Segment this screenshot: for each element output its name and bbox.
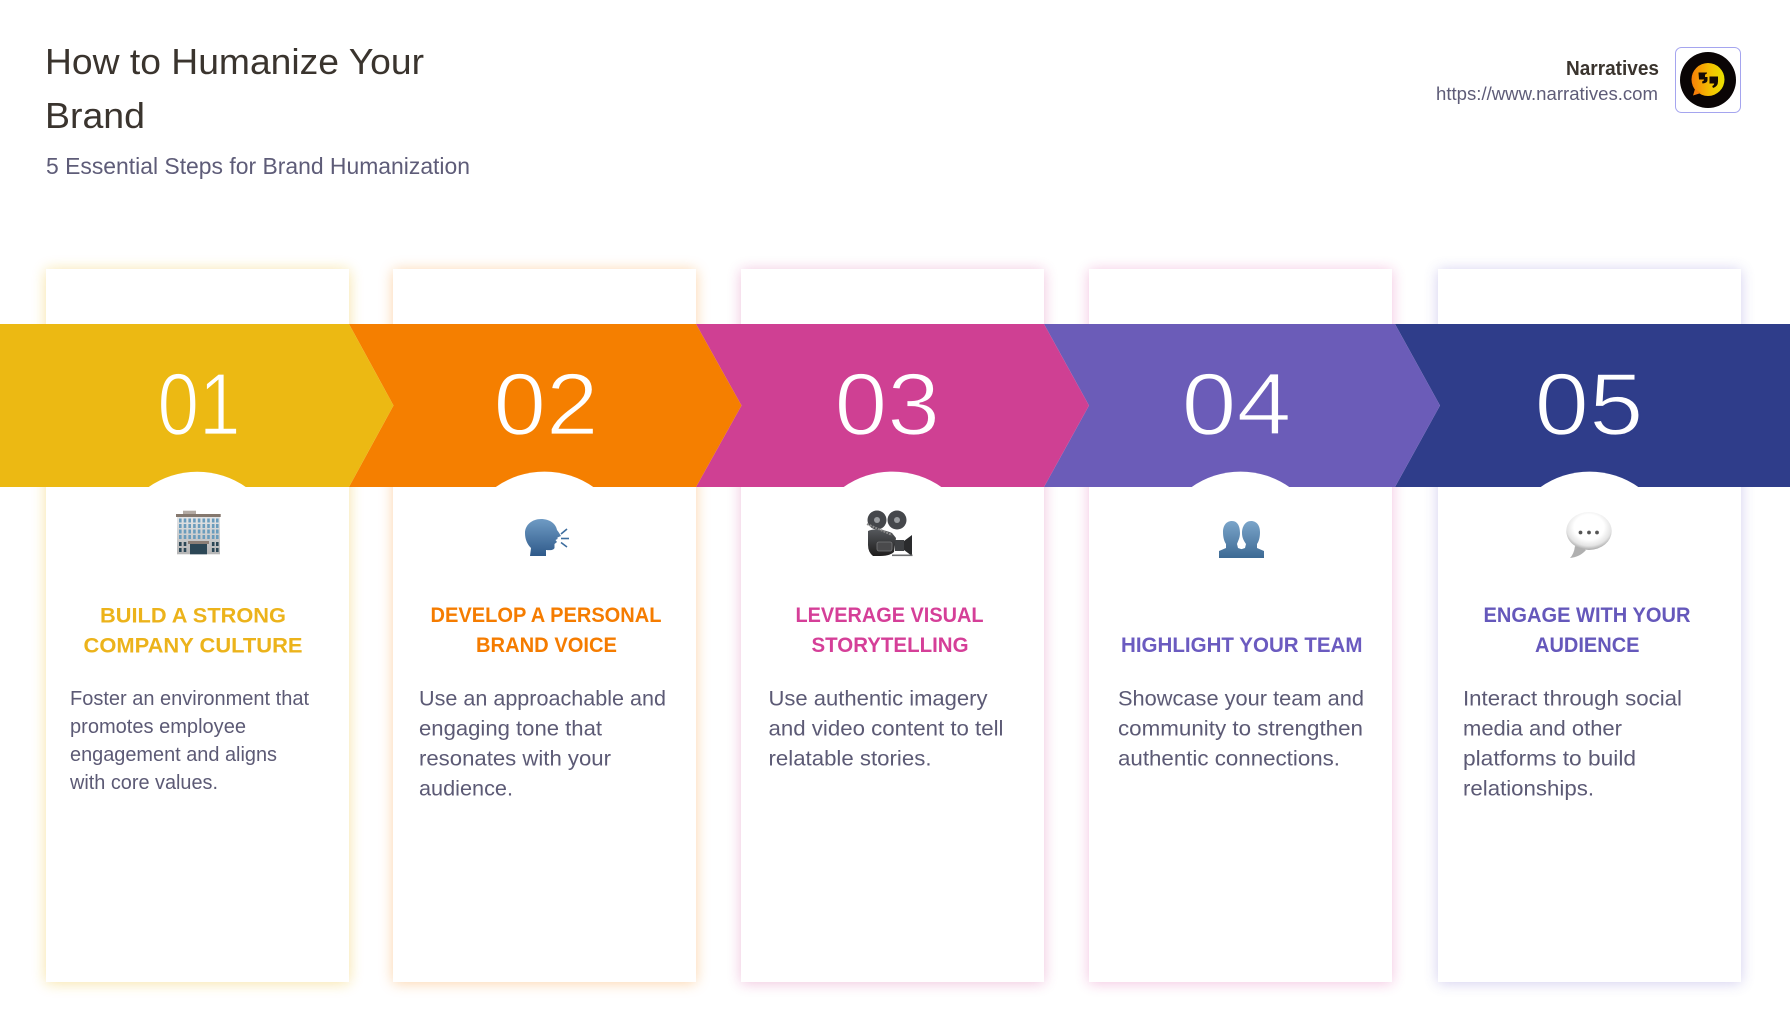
body text: step 2 (419, 687, 666, 801)
heading: step 5 (1484, 603, 1691, 657)
heading: step 4: HIGHLIGHT YOUR TEAM (1121, 633, 1362, 657)
body text: step 2: Use an approachable and (419, 687, 666, 711)
heading: step 5: AUDIENCE (1535, 633, 1640, 657)
heading: step 3 (796, 603, 984, 657)
body text: step 1: engagement and aligns (70, 744, 277, 766)
body text: step 1: promotes employee (70, 716, 246, 738)
icon: speech balloon (1566, 512, 1612, 558)
body text: step 5: relationships. (1463, 777, 1594, 801)
chevron 3 band with number (696, 324, 1089, 487)
body text: step 4 (1118, 687, 1364, 771)
chevron 2 band with number: 02 (494, 354, 598, 454)
body text: step 5: platforms to build (1463, 747, 1636, 771)
title: Brand (45, 95, 145, 136)
body text: step 4: Showcase your team and (1118, 687, 1364, 711)
panel: step 4 card (1089, 269, 1392, 983)
body text: step 3: relatable stories. (768, 747, 932, 771)
body text: step 2: audience. (419, 777, 513, 801)
body text: step 5 (1463, 687, 1682, 801)
body text: step 1: with core values. (69, 772, 218, 794)
heading: step 1: COMPANY CULTURE (84, 634, 302, 658)
title: How to Humanize Your (45, 41, 424, 82)
chevron 3 band with number: 03 (834, 354, 940, 454)
heading: step 3: LEVERAGE VISUAL (796, 603, 984, 627)
body text: step 2: engaging tone that (419, 717, 602, 741)
chevron 1 band with number (0, 324, 394, 487)
chevron 5 band with number (1395, 324, 1790, 487)
logo (1676, 48, 1740, 112)
brand name and url: https://www.narratives.com (1436, 83, 1658, 104)
body text: step 1: Foster an environment that (70, 688, 309, 710)
chevron 1 band with number: 01 (158, 354, 240, 454)
heading: step 2: DEVELOP A PERSONAL (430, 603, 662, 627)
body text: step 4: authentic connections. (1118, 747, 1340, 771)
panel: step 3 card (741, 269, 1044, 983)
panel: step 5 card (1438, 269, 1741, 983)
body text: step 3: and video content to tell (768, 717, 1004, 741)
chevron 4 band with number (1044, 324, 1440, 487)
icon: movie camera (867, 510, 912, 556)
chevron 4 band with number: 04 (1182, 354, 1292, 454)
body text: step 4: community to strengthen (1118, 717, 1363, 741)
chevron 2 band with number (349, 324, 742, 487)
heading: step 2: BRAND VOICE (476, 633, 617, 657)
body text: step 2: resonates with your (419, 747, 611, 771)
subtitle: 5 Essential Steps for Brand Humanization (46, 153, 470, 179)
body text: step 3 (768, 687, 1004, 771)
title (45, 41, 424, 136)
heading: step 2 (430, 603, 662, 657)
body text: step 1 (69, 688, 309, 794)
icon: two silhouettes (1219, 521, 1264, 558)
heading: step 1 (84, 604, 302, 658)
body text: step 5: Interact through social (1463, 687, 1682, 711)
chevron 5 band with number: 05 (1534, 354, 1644, 454)
icon: office building (176, 511, 221, 554)
panel: step 1 card (46, 269, 349, 983)
brand name and url (1436, 58, 1659, 104)
body text: step 5: media and other (1463, 717, 1622, 741)
body text: step 3: Use authentic imagery (768, 687, 988, 711)
heading: step 5: ENGAGE WITH YOUR (1484, 603, 1691, 627)
icon: speaking head (525, 519, 569, 556)
white arc notches over the band (148, 472, 1639, 488)
heading: step 1: BUILD A STRONG (100, 604, 286, 628)
brand name and url: Narratives (1566, 58, 1659, 80)
panel: step 2 card (393, 269, 696, 983)
heading: step 3: STORYTELLING (812, 633, 968, 657)
